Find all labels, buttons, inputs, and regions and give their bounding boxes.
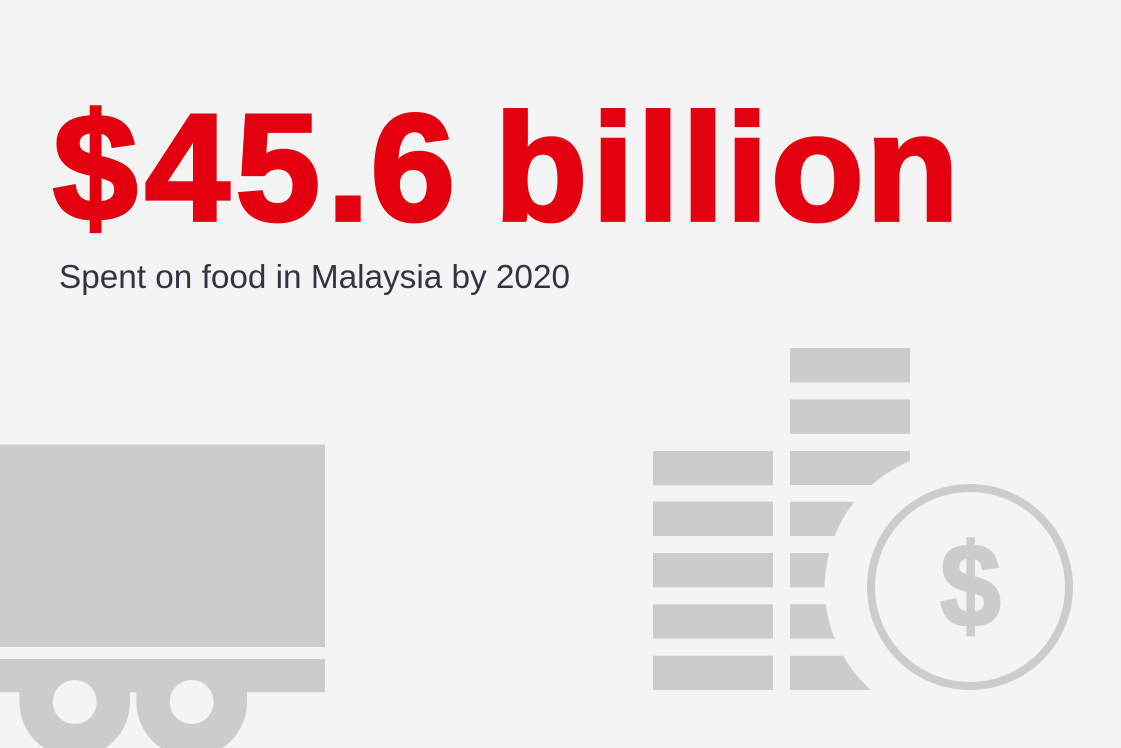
subtitle: Spent on food in Malaysia by 2020 — [59, 258, 570, 295]
left coin stack — [653, 451, 773, 690]
right coin stack — [790, 348, 910, 690]
dollar sign: $ — [940, 520, 1001, 652]
icon: coin stacks with dollar coin — [653, 348, 1069, 690]
dollar coin outline — [871, 488, 1069, 686]
icon: delivery truck — [0, 444, 325, 748]
truck cargo box — [0, 444, 325, 647]
title: $45.6 billion: $45.6 billion — [53, 83, 959, 253]
truck chassis and wheels — [0, 659, 325, 748]
